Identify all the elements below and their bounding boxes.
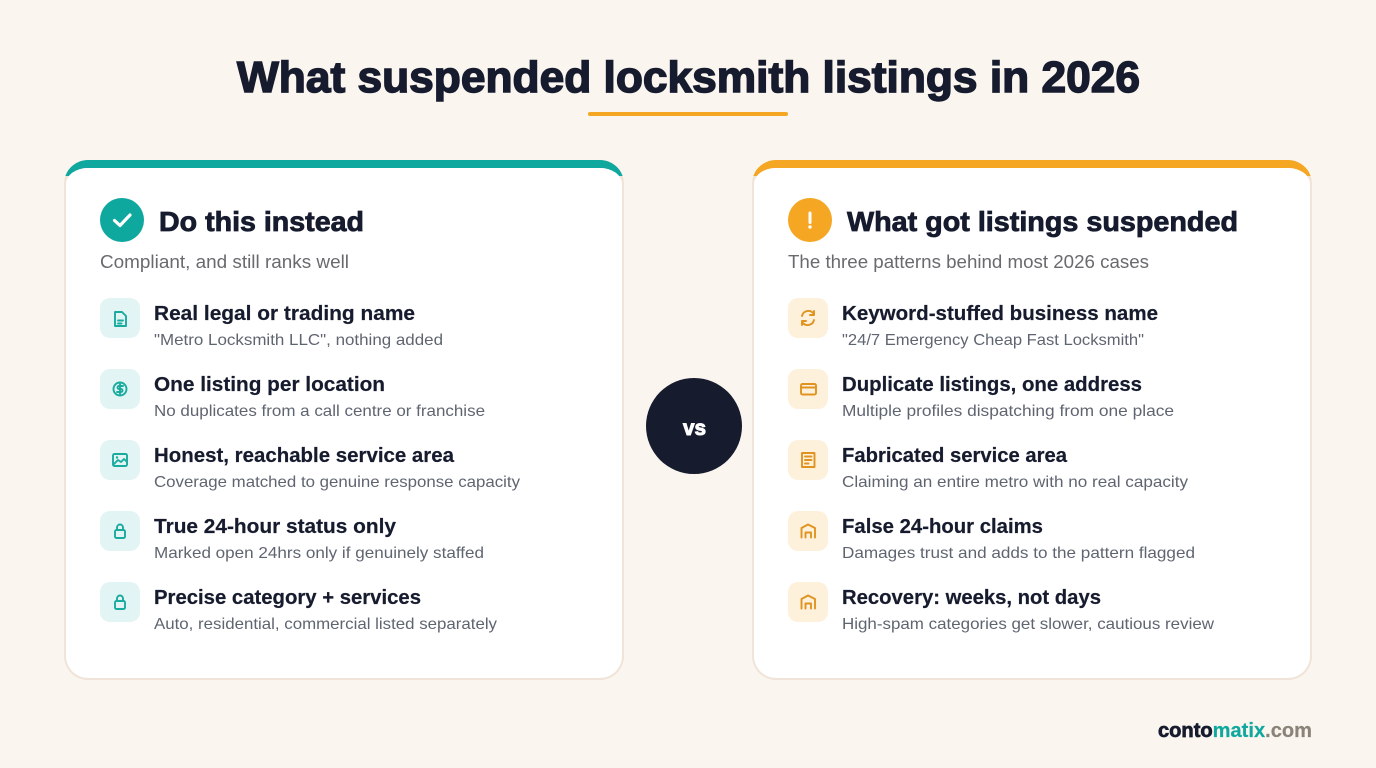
panel: what got listings suspended <box>752 160 1312 680</box>
item: keyword-stuffed name <box>788 298 1158 349</box>
item: honest service area: Honest, reachable service area <box>154 445 455 467</box>
item: real legal name: "Metro Locksmith LLC", nothing added <box>154 332 443 349</box>
item: honest service area: Coverage matched to genuine response capacity <box>154 474 520 491</box>
item: one listing per location <box>100 369 485 420</box>
item: fabricated service area: Claiming an entire metro with no real capacity <box>842 474 1188 491</box>
item: recovery: High-spam categories get slower, cautious review <box>842 616 1214 633</box>
vs badge: vs <box>683 417 706 440</box>
item: true 24-hour status <box>100 511 484 562</box>
brand footer: contomatix.com <box>1158 720 1312 742</box>
heading: do this instead: Do this instead <box>159 206 364 237</box>
item: recovery <box>788 582 1214 633</box>
item: fabricated service area: Fabricated service area <box>842 445 1068 467</box>
subheading: Compliant, and still ranks well <box>100 252 349 272</box>
item: duplicate listings: Duplicate listings, one address <box>842 374 1142 396</box>
item: precise category <box>100 582 497 633</box>
item: keyword-stuffed name: Keyword-stuffed business name <box>842 303 1158 325</box>
icon: check circle <box>100 198 144 242</box>
item: false 24-hour claims: False 24-hour claims <box>842 516 1043 538</box>
item: one listing per location: One listing per location <box>154 374 385 396</box>
item: honest service area <box>100 440 520 491</box>
icon: exclamation circle <box>788 198 832 242</box>
item: precise category: Precise category + services <box>154 587 421 609</box>
item: real legal name <box>100 298 443 349</box>
vs badge <box>646 378 742 474</box>
heading: what got listings suspended: What got listings suspended <box>847 206 1238 237</box>
item: precise category: Auto, residential, commercial listed separately <box>154 616 497 633</box>
item: one listing per location: No duplicates from a call centre or franchise <box>154 403 485 420</box>
item: duplicate listings: Multiple profiles dispatching from one place <box>842 403 1174 420</box>
title: What suspended locksmith listings in 2026 <box>237 53 1140 102</box>
item: true 24-hour status: Marked open 24hrs only if genuinely staffed <box>154 545 484 562</box>
subheading: The three patterns behind most 2026 cases <box>788 252 1149 272</box>
title underline <box>588 112 788 116</box>
item: keyword-stuffed name: "24/7 Emergency Cheap Fast Locksmith" <box>842 332 1144 349</box>
item: true 24-hour status: True 24-hour status only <box>154 516 397 538</box>
item: fabricated service area <box>788 440 1188 491</box>
item: false 24-hour claims <box>788 511 1195 562</box>
item: recovery: Recovery: weeks, not days <box>842 587 1101 609</box>
item: real legal name: Real legal or trading name <box>154 303 415 325</box>
item: false 24-hour claims: Damages trust and adds to the pattern flagged <box>842 545 1195 562</box>
panel: do this instead <box>64 160 624 680</box>
item: duplicate listings <box>788 369 1174 420</box>
